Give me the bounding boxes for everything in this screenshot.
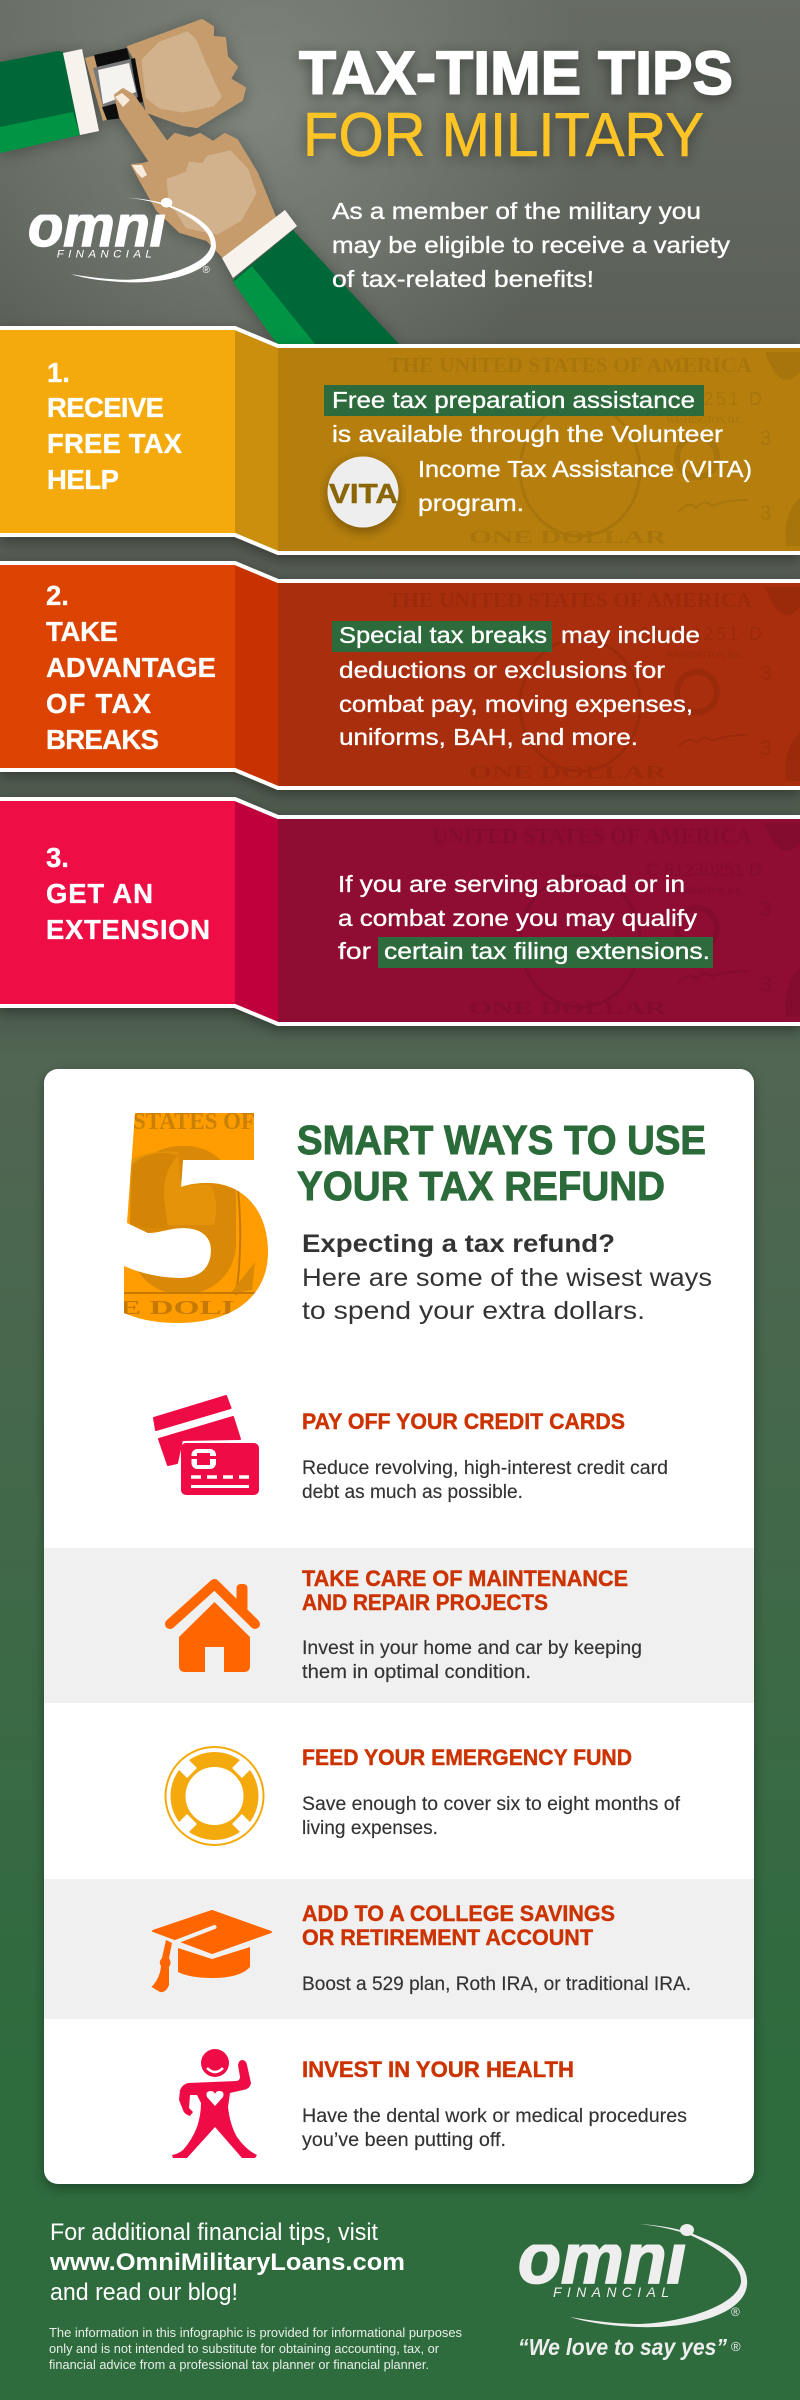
heading: receive free tax help: 1. bbox=[47, 357, 70, 388]
text: invest in health: INVEST IN YOUR HEALTH bbox=[302, 2057, 574, 2082]
icon: healthy person bbox=[172, 2049, 257, 2158]
heading: receive free tax help: FREE TAX bbox=[47, 428, 183, 459]
text: emergency fund: FEED YOUR EMERGENCY FUND bbox=[302, 1745, 632, 1770]
text: emergency fund: living expenses. bbox=[302, 1818, 438, 1839]
footer call to action: For additional financial tips, visit bbox=[50, 2219, 378, 2246]
intro text: to spend your extra dollars. bbox=[302, 1297, 645, 1325]
footer call to action: www.OmniMilitaryLoans.com bbox=[49, 2249, 405, 2276]
text block: for bbox=[338, 938, 371, 964]
band shape bbox=[0, 563, 800, 788]
disclaimer: financial advice from a professional tax planner or financial planner. bbox=[49, 2357, 429, 2372]
text: college savings: ADD TO A COLLEGE SAVINGS bbox=[302, 1901, 615, 1926]
row background: maintenance bbox=[44, 1548, 754, 1703]
intro text: may be eligible to receive a variety bbox=[332, 232, 730, 258]
dollar watermark: ONE DOLLAR bbox=[469, 762, 668, 782]
heading: receive free tax help bbox=[47, 357, 183, 495]
icon: graduation cap bbox=[152, 1911, 271, 1992]
dollar watermark: 81230251 D bbox=[640, 624, 762, 644]
band shape bbox=[0, 799, 800, 1024]
text block bbox=[332, 621, 700, 750]
heading: SMART WAYS TO USE bbox=[297, 1117, 706, 1163]
dollar watermark: ONE DOLLAR bbox=[469, 998, 668, 1018]
footer call to action bbox=[49, 2219, 405, 2306]
title: TAX-TIME TIPS bbox=[299, 39, 733, 107]
disclaimer: The information in this infographic is provided for informational purposes bbox=[49, 2325, 462, 2340]
dollar watermark: 3 bbox=[760, 662, 772, 685]
intro text bbox=[302, 1230, 712, 1325]
heading: get an extension bbox=[46, 842, 210, 945]
text: maintenance and repair: TAKE CARE OF MAINTENANCE bbox=[302, 1566, 628, 1591]
panel: smart ways card bbox=[44, 1069, 754, 2184]
text: invest in health: you’ve been putting off. bbox=[302, 2130, 506, 2151]
heading: get an extension: EXTENSION bbox=[46, 914, 210, 945]
text block: uniforms, BAH, and more. bbox=[339, 724, 638, 750]
text: maintenance and repair: Invest in your home and car by keeping bbox=[302, 1638, 642, 1659]
text: college savings bbox=[302, 1901, 691, 1995]
text block: If you are serving abroad or in bbox=[338, 871, 685, 897]
shirt cuff bbox=[63, 49, 99, 135]
logo: Omni Financial top: ® bbox=[203, 265, 211, 276]
dollar watermark: UNITED STATES OF AMERICA bbox=[432, 824, 753, 848]
smartwatch bbox=[93, 48, 143, 120]
text block: program. bbox=[418, 490, 524, 516]
tagline: ® bbox=[731, 2339, 741, 2354]
dollar watermark: 3 bbox=[760, 898, 772, 921]
text: college savings: OR RETIREMENT ACCOUNT bbox=[302, 1925, 594, 1950]
text: maintenance and repair bbox=[302, 1566, 642, 1683]
heading: receive free tax help: HELP bbox=[47, 464, 119, 495]
dollar watermark: WASHINGTON, D.C. bbox=[666, 415, 744, 425]
heading: get an extension: GET AN bbox=[46, 878, 153, 909]
big dollar-filled number 5 bbox=[124, 1113, 268, 1323]
text: emergency fund bbox=[302, 1745, 681, 1839]
dollar watermark: THE UNITED STATES OF AMERICA bbox=[388, 588, 753, 612]
big dollar-filled number 5: STATES OF bbox=[133, 1109, 255, 1135]
intro text: Expecting a tax refund? bbox=[302, 1230, 615, 1258]
intro text: of tax-related benefits! bbox=[332, 266, 594, 292]
heading: YOUR TAX REFUND bbox=[297, 1163, 665, 1209]
logo: Omni Financial footer bbox=[518, 2219, 747, 2327]
dollar watermark: 81230251 D bbox=[640, 389, 762, 409]
dollar watermark bbox=[432, 823, 800, 1018]
heading: take advantage of tax breaks: BREAKS bbox=[46, 724, 159, 755]
dollar watermark bbox=[388, 587, 800, 782]
disclaimer bbox=[49, 2325, 462, 2372]
dollar watermark: 3 bbox=[760, 427, 772, 450]
logo: Omni Financial footer: ® bbox=[731, 2305, 740, 2319]
heading: take advantage of tax breaks: ADVANTAGE bbox=[46, 652, 216, 683]
disclaimer: only and is not intended to substitute for obtaining accounting, tax, or bbox=[49, 2341, 440, 2356]
heading bbox=[297, 1117, 706, 1209]
text block: is available through the Volunteer bbox=[332, 421, 723, 447]
dollar watermark: WASHINGTON, D.C. bbox=[666, 650, 744, 660]
dollar watermark: C 81230251 D bbox=[646, 860, 762, 880]
dollar watermark: THE UNITED STATES OF AMERICA bbox=[388, 353, 753, 377]
band shape bbox=[0, 328, 800, 553]
heading: receive free tax help: RECEIVE bbox=[47, 392, 164, 423]
icon: house bbox=[170, 1584, 255, 1672]
icon: VITA badge: VITA bbox=[329, 478, 398, 509]
text: pay off credit cards bbox=[302, 1409, 668, 1503]
title: FOR MILITARY bbox=[303, 101, 704, 170]
text: maintenance and repair: them in optimal condition. bbox=[302, 1662, 531, 1683]
text: pay off credit cards: PAY OFF YOUR CREDIT CARDS bbox=[302, 1409, 625, 1434]
icon: credit cards bbox=[154, 1396, 259, 1495]
heading: get an extension: 3. bbox=[46, 842, 69, 873]
text block: deductions or exclusions for bbox=[339, 657, 665, 683]
text block bbox=[338, 871, 713, 968]
text: pay off credit cards: Reduce revolving, high-interest credit card bbox=[302, 1458, 668, 1479]
row background: college savings bbox=[44, 1879, 754, 2019]
dollar watermark: ONE DOLLAR bbox=[469, 527, 668, 547]
pointing hand bbox=[115, 89, 275, 257]
panel: tip 2 bbox=[0, 563, 800, 788]
big dollar-filled number 5: E DOLL bbox=[119, 1297, 244, 1319]
text: emergency fund: Save enough to cover six to eight months of bbox=[302, 1794, 681, 1815]
tagline: “We love to say yes” bbox=[518, 2334, 727, 2360]
text block: Income Tax Assistance (VITA) bbox=[418, 456, 752, 482]
text block: Special tax breaks bbox=[339, 622, 547, 648]
intro text bbox=[332, 198, 730, 292]
text block: combat pay, moving expenses, bbox=[339, 691, 693, 717]
icon: VITA badge bbox=[328, 456, 398, 528]
dollar watermark: WASHINGTON, D.C. bbox=[666, 886, 744, 896]
heading: take advantage of tax breaks bbox=[46, 580, 216, 755]
second sleeve bbox=[233, 230, 399, 344]
panel: tip 1 bbox=[0, 328, 800, 553]
dollar watermark: 3 bbox=[760, 502, 772, 525]
text block: a combat zone you may qualify bbox=[338, 905, 697, 931]
text: maintenance and repair: AND REPAIR PROJECTS bbox=[302, 1590, 548, 1615]
left sleeve bbox=[0, 51, 80, 153]
panel: tip 3 bbox=[0, 799, 800, 1024]
text block: certain tax filing extensions. bbox=[384, 938, 710, 964]
heading: take advantage of tax breaks: 2. bbox=[46, 580, 69, 611]
logo: Omni Financial top: FINANCIAL bbox=[57, 249, 152, 261]
title bbox=[299, 39, 733, 170]
illustration: hands pointing at smartwatch bbox=[0, 20, 399, 344]
text: invest in health bbox=[302, 2057, 687, 2151]
text: college savings: Boost a 529 plan, Roth IRA, or traditional IRA. bbox=[302, 1974, 691, 1995]
dollar watermark: 3 bbox=[760, 973, 772, 996]
text block: Free tax preparation assistance bbox=[332, 387, 695, 413]
wrist and fist bbox=[85, 20, 245, 127]
heading: take advantage of tax breaks: TAKE bbox=[46, 616, 118, 647]
dollar watermark bbox=[388, 352, 800, 547]
text block bbox=[324, 385, 752, 516]
intro text: Here are some of the wisest ways bbox=[302, 1264, 712, 1292]
dollar watermark: 3 bbox=[760, 737, 772, 760]
second cuff bbox=[222, 210, 297, 278]
logo: Omni Financial top: omni bbox=[28, 193, 167, 259]
text: pay off credit cards: debt as much as possible. bbox=[302, 1482, 523, 1503]
text: invest in health: Have the dental work or medical procedures bbox=[302, 2106, 687, 2127]
footer call to action: and read our blog! bbox=[50, 2279, 238, 2306]
intro text: As a member of the military you bbox=[332, 198, 701, 224]
heading: take advantage of tax breaks: OF TAX bbox=[46, 688, 152, 719]
logo: Omni Financial footer: omni bbox=[518, 2219, 688, 2299]
icon: life preserver bbox=[166, 1747, 264, 1845]
text block: may include bbox=[561, 622, 700, 648]
logo: Omni Financial footer: FINANCIAL bbox=[553, 2284, 669, 2300]
logo: Omni Financial top bbox=[28, 193, 216, 282]
